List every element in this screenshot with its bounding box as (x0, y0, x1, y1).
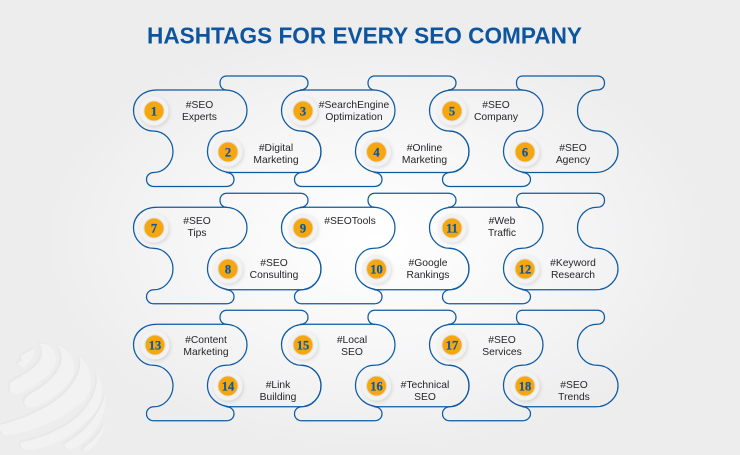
item 18 (510, 372, 590, 403)
item 5 (438, 96, 519, 126)
item 16: #Technical (401, 380, 449, 391)
item 8: #SEO (260, 258, 288, 269)
item 7: 7 (151, 222, 157, 236)
item 3: 3 (300, 104, 306, 118)
item 5: Company (474, 112, 519, 123)
item 4: #Online (407, 143, 443, 154)
item 6: Agency (556, 155, 591, 166)
item 2: Marketing (253, 155, 299, 166)
globe watermark (0, 344, 105, 451)
item 11: 11 (446, 222, 458, 236)
item 18: Trends (558, 392, 590, 403)
item 5: #SEO (482, 100, 510, 111)
item 3 (288, 96, 389, 126)
puzzle outline: row 1 (134, 76, 618, 186)
item 12: Research (551, 270, 595, 281)
item 9: 9 (300, 222, 306, 236)
item 4: 4 (373, 146, 380, 160)
item 10: #Google (409, 258, 448, 269)
item 17: Services (482, 347, 522, 358)
puzzle outline: row 2 (134, 193, 618, 304)
puzzle outline: row 3 (134, 310, 618, 421)
item 8: Consulting (250, 270, 299, 281)
item 14: #Link (266, 380, 291, 391)
item 16: SEO (414, 392, 436, 403)
item 11: Traffic (488, 228, 516, 239)
item 1: 1 (151, 104, 157, 118)
item 11: #Web (489, 216, 516, 227)
item 12: 12 (519, 262, 531, 276)
item 10: 10 (370, 262, 383, 276)
item 6: 6 (522, 146, 528, 160)
item 15 (288, 330, 367, 360)
item 7 (140, 214, 211, 242)
item 14: 14 (222, 380, 235, 394)
item 1: #SEO (186, 100, 213, 111)
item 7: Tips (187, 228, 207, 239)
item 3: #SearchEngine (319, 100, 389, 111)
item 12: #Keyword (550, 258, 596, 269)
item 13: #Content (185, 335, 227, 346)
item 15: #Local (337, 335, 367, 346)
item 10: Rankings (407, 270, 449, 281)
item 7: #SEO (183, 216, 211, 227)
item 13: Marketing (183, 347, 229, 358)
item 6 (510, 138, 591, 166)
item 14 (214, 372, 297, 403)
item 17 (438, 330, 522, 360)
item 4 (362, 138, 447, 166)
item 13: 13 (149, 338, 161, 352)
item 9: #SEOTools (324, 216, 376, 227)
item 11 (438, 214, 516, 242)
item 17: #SEO (488, 335, 516, 346)
item 1: Experts (182, 112, 217, 123)
item 17: 17 (446, 338, 458, 352)
item 3: Optimization (325, 112, 383, 123)
title: HASHTAGS FOR EVERY SEO COMPANY (147, 22, 582, 48)
item 1 (140, 96, 217, 126)
item 18: 18 (519, 380, 531, 394)
item 5: 5 (449, 104, 455, 118)
item 6: #SEO (559, 143, 587, 154)
item 16: 16 (370, 380, 383, 394)
item 14: Building (260, 392, 297, 403)
item 15: SEO (341, 347, 363, 358)
item 4: Marketing (402, 155, 447, 166)
item 10 (362, 254, 449, 284)
item 15: 15 (297, 338, 309, 352)
item 2 (214, 138, 299, 166)
item 16 (362, 372, 449, 403)
item 18: #SEO (560, 380, 588, 391)
item 2: #Digital (259, 143, 293, 154)
item 2: 2 (225, 146, 231, 160)
item 8 (214, 254, 299, 284)
item 8: 8 (225, 262, 231, 276)
item 12 (510, 254, 596, 284)
item 13 (140, 330, 229, 360)
item 9 (288, 214, 376, 242)
